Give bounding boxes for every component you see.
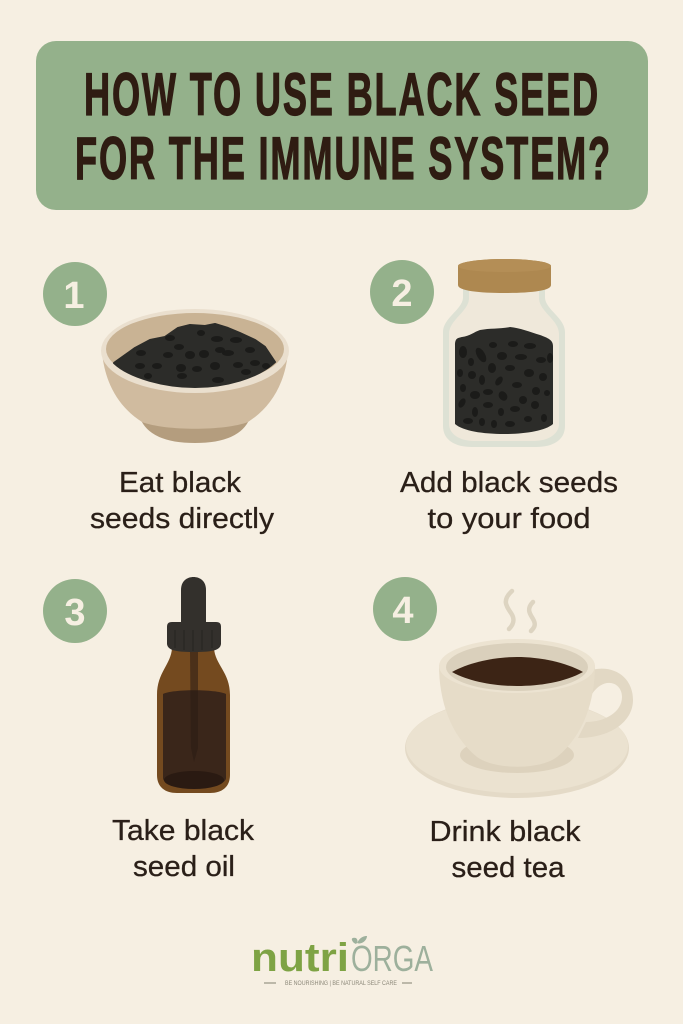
label: step 2: to your food — [428, 503, 590, 535]
step 2 number badge: 2 — [391, 273, 413, 315]
icon: bowl of black seeds — [101, 309, 289, 443]
step 3 number badge — [43, 579, 107, 643]
title banner — [36, 41, 648, 210]
step 1 number badge: 1 — [63, 275, 85, 317]
steam — [506, 591, 535, 631]
label: step 1 — [90, 467, 275, 535]
step 4 number badge — [373, 577, 437, 641]
logo: nutriORGA: ORGA — [351, 938, 433, 979]
icon: dropper bottle of oil — [157, 577, 230, 793]
label: step 3 — [112, 815, 255, 883]
step 4 number badge: 4 — [392, 590, 414, 632]
label: step 1: seeds directly — [90, 503, 275, 535]
icon: cup of black seed tea on saucer — [405, 591, 633, 798]
logo: nutriORGA: nutri — [251, 936, 349, 980]
step 3 number badge: 3 — [64, 592, 86, 634]
step 1 number badge — [43, 262, 107, 326]
label: step 2: Add black seeds — [400, 467, 618, 499]
logo: nutriORGA — [251, 936, 433, 987]
label: step 4: Drink black — [430, 816, 581, 848]
label: step 3: seed oil — [133, 851, 235, 883]
label: step 4 — [430, 816, 581, 884]
label: step 2 — [400, 467, 618, 535]
logo: nutriORGA: BE NOURISHING | BE NATURAL SELF CARE — [285, 981, 397, 987]
label: step 1: Eat black — [119, 467, 241, 499]
icon: glass jar of black seeds — [443, 259, 565, 447]
label: step 3: Take black — [112, 815, 255, 847]
step 2 number badge — [370, 260, 434, 324]
label: step 4: seed tea — [452, 852, 565, 884]
